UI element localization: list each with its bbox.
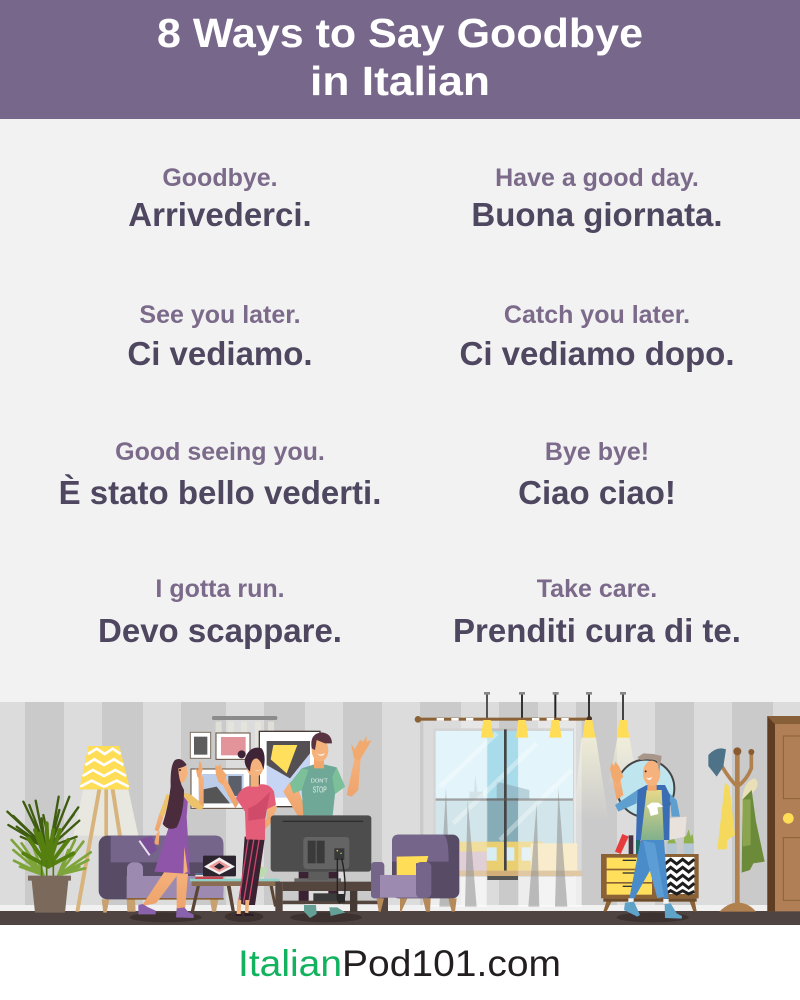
man in teal shirt: STOP bbox=[313, 785, 327, 795]
phrase: See you later bbox=[127, 301, 313, 372]
sofa bbox=[99, 836, 224, 913]
sideboard with books and plants bbox=[601, 829, 699, 911]
phrase: Bye bye bbox=[518, 438, 676, 511]
phrase: Good seeing you: È stato bello vederti. bbox=[59, 474, 381, 511]
gallery wall pictures bbox=[190, 716, 320, 808]
phrase: See you later: See you later. bbox=[139, 301, 301, 329]
coffee table with laptop bbox=[190, 856, 280, 912]
phrase: Goodbye: Goodbye. bbox=[162, 164, 278, 192]
phrase: Take care: Prenditi cura di te. bbox=[453, 612, 741, 649]
phrase: See you later: Ci vediamo. bbox=[127, 335, 313, 372]
phrase: I gotta run: I gotta run. bbox=[155, 575, 285, 603]
phrase: Bye bye: Bye bye! bbox=[545, 438, 649, 466]
phrase: I gotta run: Devo scappare. bbox=[98, 612, 342, 649]
title banner: in Italian bbox=[310, 58, 490, 104]
man in teal shirt bbox=[283, 732, 372, 922]
phrase: Take care: Take care. bbox=[537, 575, 657, 603]
footer website logo: ItalianPod101.com bbox=[238, 943, 561, 984]
curtains and rod bbox=[415, 716, 629, 907]
phrase: I gotta run bbox=[98, 575, 342, 649]
left half of scene bbox=[7, 716, 388, 922]
man in teal shirt: DON'T bbox=[311, 779, 328, 785]
phrase: Goodbye: Arrivederci. bbox=[128, 196, 312, 233]
phrase: Bye bye: Ciao ciao! bbox=[518, 474, 676, 511]
phrase: Good seeing you bbox=[59, 438, 381, 511]
potted plant bbox=[7, 797, 91, 913]
television and media console bbox=[271, 815, 388, 912]
striped wall bbox=[0, 702, 800, 912]
door bbox=[767, 716, 800, 911]
title banner: 8 Ways to Say Goodbye bbox=[157, 10, 643, 56]
coat rack bbox=[708, 747, 765, 912]
phrases panel bbox=[0, 119, 800, 702]
phrase: Have a good day: Have a good day. bbox=[495, 164, 699, 192]
title banner bbox=[0, 0, 800, 119]
phrase: Goodbye bbox=[128, 164, 312, 233]
phrase: Have a good day bbox=[471, 164, 723, 233]
phrase: Good seeing you: Good seeing you. bbox=[115, 438, 325, 466]
phrase: Have a good day: Buona giornata. bbox=[471, 196, 723, 233]
floor bbox=[0, 911, 800, 925]
phrase: Catch you later: Ci vediamo dopo. bbox=[459, 335, 735, 372]
right half of scene bbox=[371, 692, 800, 922]
living room illustration bbox=[0, 692, 800, 925]
floor lamp bbox=[73, 746, 138, 912]
phrase: Take care bbox=[453, 575, 741, 649]
pendant lights and beams bbox=[484, 692, 638, 820]
armchair bbox=[371, 835, 459, 912]
window with city view bbox=[433, 728, 582, 880]
woman in pink top bbox=[215, 748, 277, 922]
woman in purple dress bbox=[130, 759, 204, 922]
walking man bbox=[610, 753, 689, 922]
phrase: Catch you later bbox=[459, 301, 735, 372]
phrase: Catch you later: Catch you later. bbox=[504, 301, 690, 329]
round mirror bbox=[617, 760, 674, 817]
